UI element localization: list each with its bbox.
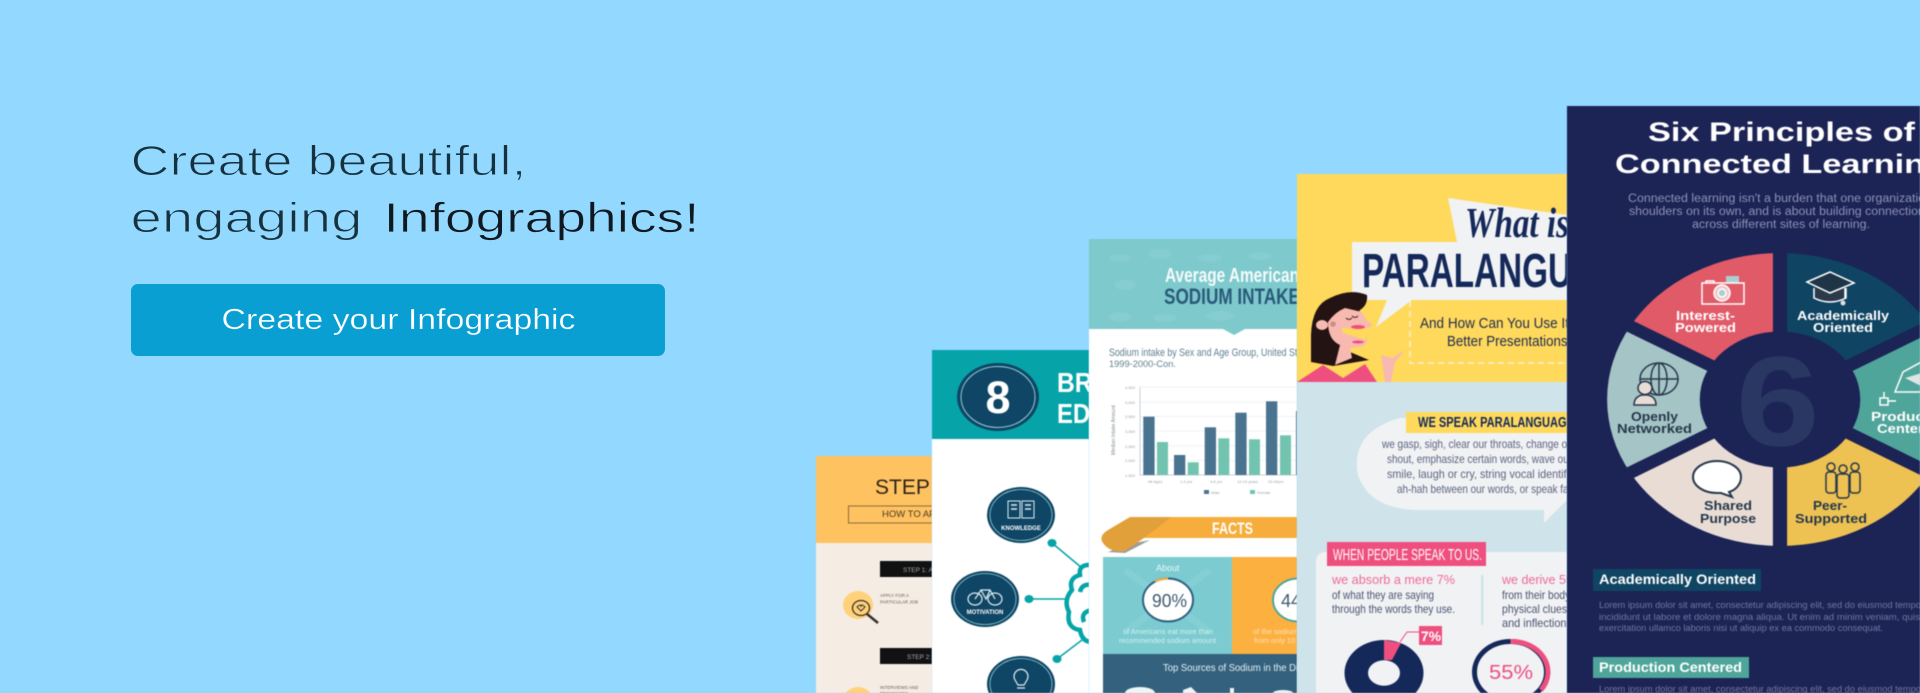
panel heading bbox=[1057, 367, 1197, 429]
section: academically oriented: exercitation ullamco laboris nisi ut aliquip ex ea commodo consequat. bbox=[1599, 623, 1883, 633]
bar chart: 3,000 bbox=[1125, 429, 1136, 434]
sector label: interest-powered: Interest- bbox=[1676, 308, 1735, 323]
bar chart: 1,500 bbox=[1125, 473, 1136, 478]
icon: speech bubble bbox=[1693, 461, 1741, 497]
panel title bbox=[1615, 117, 1920, 179]
section: production centered: Production Centered bbox=[1599, 660, 1742, 675]
icon: brain bbox=[1067, 565, 1092, 642]
card: when people speak to us: we absorb a mere 7% bbox=[1331, 572, 1455, 587]
panel: 8 brain-based education bbox=[931, 349, 1090, 693]
card: when people speak to us: WHEN PEOPLE SPEAK TO US. bbox=[1333, 547, 1482, 564]
step 2 label bbox=[880, 648, 970, 664]
donut chart: 7 percent: 7% bbox=[1421, 628, 1442, 644]
subtitle block bbox=[1410, 301, 1584, 363]
icon: camera bbox=[1702, 276, 1744, 304]
sector label: academically oriented: Oriented bbox=[1813, 320, 1873, 335]
bar chart: 20-39yrs bbox=[1268, 479, 1284, 484]
sector label: production centered bbox=[1871, 409, 1920, 436]
connector lines bbox=[1024, 539, 1082, 663]
icon: three people bbox=[1826, 463, 1860, 498]
section: academically oriented: Lorem ipsum dolor sit amet, consectetur adipiscing elit, sed do eiusmod tempor bbox=[1599, 600, 1920, 610]
illustration: woman bbox=[1297, 292, 1405, 382]
bar chart: Male bbox=[1211, 490, 1220, 495]
panel: average american sodium intake bbox=[1088, 238, 1298, 693]
card: when people speak to us bbox=[1316, 542, 1618, 693]
panel title bbox=[1164, 265, 1300, 309]
card: when people speak to us: of what they are saying bbox=[1332, 588, 1434, 602]
number badge 8 bbox=[957, 363, 1039, 431]
sector label: shared purpose: Purpose bbox=[1700, 511, 1756, 526]
wheel chart: 6 bbox=[1736, 329, 1820, 473]
sector label: interest-powered bbox=[1675, 308, 1736, 335]
bar chart: 2,000 bbox=[1125, 458, 1136, 463]
facts ribbon: FACTS bbox=[1212, 519, 1253, 538]
badge: motivation: MOTIVATION bbox=[967, 610, 1003, 616]
fact: 90 percent: recommended sodium amount bbox=[1119, 636, 1217, 645]
button: create your infographic bbox=[131, 284, 665, 356]
heading: create beautiful, engaging infographics: engaging bbox=[130, 194, 362, 241]
section: academically oriented: Academically Oriented bbox=[1599, 572, 1756, 587]
badge: knowledge bbox=[987, 487, 1055, 543]
sector label: peer-supported bbox=[1795, 498, 1867, 526]
bar chart: 1-3 yrs bbox=[1180, 479, 1192, 484]
badge: idea bbox=[987, 656, 1055, 693]
step 2 icon bbox=[843, 687, 873, 693]
sector label: peer-supported: Peer- bbox=[1813, 498, 1847, 513]
sector label: academically oriented: Academically bbox=[1797, 308, 1890, 323]
bar chart: 2,500 bbox=[1125, 444, 1136, 449]
ring chart: 55 percent bbox=[1474, 641, 1548, 693]
heading: create beautiful, engaging infographics bbox=[130, 137, 700, 241]
fact: 44 percent: of the sodium bbox=[1253, 627, 1297, 636]
badge: motivation bbox=[951, 571, 1019, 627]
facts ribbon bbox=[1101, 517, 1297, 553]
step 1 label bbox=[880, 561, 950, 577]
intro paragraph: shoulders on its own, and is about building connections bbox=[1629, 206, 1920, 218]
sector label: interest-powered: Powered bbox=[1675, 320, 1736, 335]
ring chart: 55 percent: 55% bbox=[1489, 662, 1533, 684]
chart caption: 1999-2000-Con. bbox=[1109, 359, 1176, 370]
panel: six principles of connected learning bbox=[1566, 105, 1920, 693]
intro paragraph: across different sites of learning. bbox=[1692, 219, 1870, 231]
bar chart bbox=[1111, 385, 1307, 495]
bar chart: 4,500 bbox=[1125, 385, 1136, 390]
bar chart: 3,500 bbox=[1125, 414, 1136, 419]
fact: 90 percent: of Americans eat more than bbox=[1123, 627, 1213, 636]
number badge 8: 8 bbox=[985, 372, 1011, 423]
sector label: openly networked: Openly bbox=[1631, 409, 1679, 424]
panel title: Six Principles of bbox=[1648, 117, 1916, 147]
section: production centered bbox=[1593, 657, 1920, 693]
step 1 text bbox=[880, 593, 918, 604]
sector label: academically oriented bbox=[1797, 308, 1890, 335]
icon: globe and person bbox=[1634, 363, 1678, 405]
panel: what is paralanguage bbox=[1296, 173, 1568, 693]
icon: magnifier with heart bbox=[843, 591, 878, 623]
fact: 90 percent: 90% bbox=[1152, 591, 1187, 611]
sector label: openly networked bbox=[1617, 409, 1692, 436]
bar chart: All Ages bbox=[1148, 479, 1162, 484]
bar chart: 4,000 bbox=[1125, 400, 1136, 405]
wheel chart bbox=[1607, 250, 1920, 550]
panel title: Connected Learning bbox=[1615, 149, 1920, 179]
bar chart: Female bbox=[1257, 490, 1271, 495]
badge: knowledge: KNOWLEDGE bbox=[1001, 526, 1041, 532]
step 1 text: APPLY FOR A bbox=[880, 593, 909, 598]
donut chart: 7 percent bbox=[1344, 626, 1442, 693]
bar chart: 12-19 years bbox=[1237, 479, 1258, 484]
fact: 90 percent bbox=[1103, 557, 1232, 654]
subtitle box bbox=[848, 506, 968, 523]
step 1 text: PARTICULAR JOB bbox=[880, 600, 918, 604]
fact: 44 percent: from only 10 bbox=[1254, 636, 1295, 645]
section: academically oriented bbox=[1593, 569, 1920, 633]
sector label: peer-supported: Supported bbox=[1795, 511, 1867, 526]
chart caption bbox=[1109, 347, 1314, 370]
sector label: openly networked: Networked bbox=[1617, 421, 1692, 436]
heading: create beautiful, engaging infographics: Create beautiful, bbox=[130, 137, 526, 184]
intro paragraph: Connected learning isn't a burden that one organization bbox=[1628, 193, 1920, 205]
top sources strip bbox=[1103, 654, 1306, 693]
header notch bbox=[1223, 329, 1245, 335]
intro paragraph bbox=[1628, 193, 1920, 231]
button: create your infographic: Create your Infographic bbox=[222, 304, 576, 336]
title speech bubble bbox=[1352, 198, 1567, 327]
card: when people speak to us: through the words they use. bbox=[1332, 602, 1455, 616]
icon: pen and nodes bbox=[1880, 360, 1920, 405]
fact: 90 percent: About bbox=[1156, 563, 1180, 573]
bar chart: 4-8 yrs bbox=[1210, 479, 1222, 484]
speech bubble: we speak paralanguage bbox=[1357, 412, 1585, 523]
heading: create beautiful, engaging infographics: Infographics! bbox=[384, 194, 700, 241]
fact: 44 percent bbox=[1232, 557, 1323, 654]
sector label: production centered: Product bbox=[1871, 409, 1920, 424]
panel: step by step how to apply infographic bbox=[815, 455, 932, 693]
icon: graduation cap bbox=[1807, 272, 1854, 306]
step 2 text bbox=[880, 685, 919, 693]
header pattern bbox=[1109, 249, 1272, 322]
sector label: shared purpose bbox=[1700, 498, 1756, 526]
step 2 text: INTERVIEWS AND bbox=[880, 685, 919, 690]
sector label: shared purpose: Shared bbox=[1704, 498, 1752, 513]
section: academically oriented: incididunt ut labore et dolore magna aliqua. Ut enim ad minim veniam, quis nostrud bbox=[1599, 612, 1920, 622]
bar chart: Median Intake Amount bbox=[1111, 405, 1117, 455]
